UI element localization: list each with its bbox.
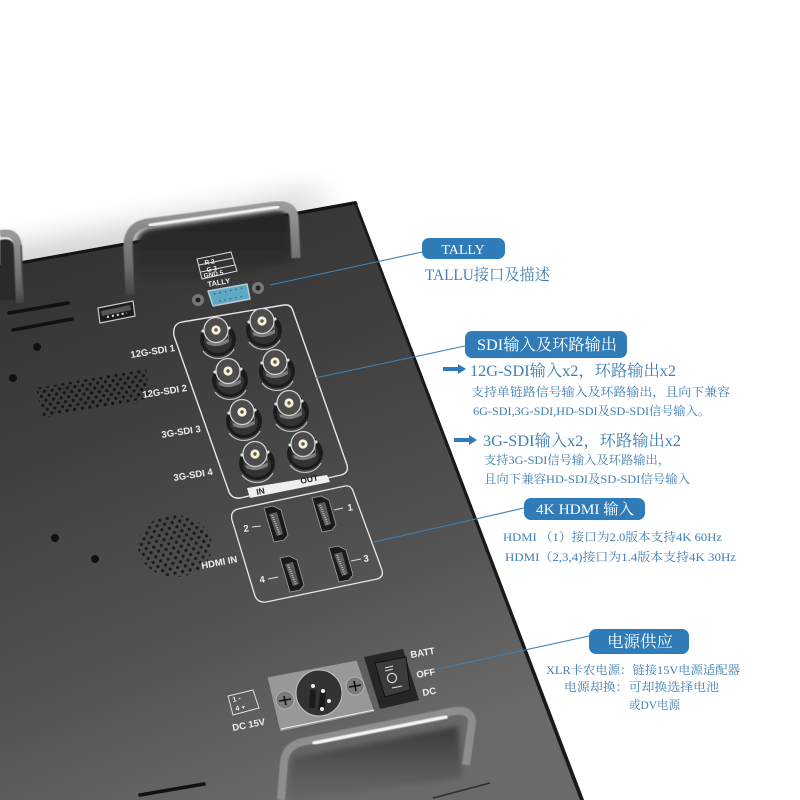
12G-SDI heading: 12G-SDI输入x2，环路输出x2	[470, 362, 676, 380]
HDMI line 2: HDMI（2,3,4)接口为1.4版本支持4K 30Hz	[505, 549, 736, 564]
tally pinout table: G 3	[206, 265, 218, 274]
USB port	[98, 301, 135, 323]
switch labels	[410, 646, 437, 699]
HDMI port numbers: 1	[347, 502, 354, 514]
SDI port labels	[130, 343, 214, 484]
DC 15V label: DC 15V	[231, 717, 267, 734]
HDMI line 1: HDMI （1）接口为2.0版本支持4K 60Hz	[503, 529, 722, 544]
HDMI port numbers: 2	[243, 523, 250, 535]
HDMI IN label: HDMI IN	[200, 554, 238, 572]
label: IN: IN	[255, 485, 266, 497]
callout: tally	[422, 238, 550, 284]
HDMI frame	[232, 486, 382, 602]
HDMI port numbers: 4	[259, 574, 266, 586]
12G-SDI line 2: 6G-SDI,3G-SDI,HD-SDI及SD-SDI信号输入。	[473, 403, 710, 418]
power line 3: 或DV电源	[629, 697, 681, 712]
leader lines	[270, 252, 589, 669]
SDI port labels: 12G-SDI 2	[142, 383, 188, 401]
arrow: 12G	[443, 364, 466, 374]
left carry handle	[0, 233, 23, 303]
DC pinout box: 4 +	[235, 704, 246, 713]
callout: power: 电源供应	[607, 633, 673, 651]
callout: power	[546, 629, 740, 712]
tally label: TALLY	[207, 276, 231, 289]
HDMI ports	[264, 496, 353, 592]
power line 2: 电源却换：可却换选择电池	[564, 679, 719, 694]
background shadow	[0, 195, 320, 290]
HDMI port numbers: 3	[363, 553, 370, 565]
callout: SDI: SDI输入及环路输出	[477, 336, 617, 354]
SDI port labels: 12G-SDI 1	[130, 343, 177, 361]
rocker power switch	[364, 649, 419, 709]
callout: HDMI	[503, 498, 736, 564]
arrow: 3G	[454, 435, 477, 445]
tally DB9 connector	[192, 282, 264, 306]
ventilation slots	[9, 303, 72, 330]
power line 1: XLR卡农电源：链接15V电源适配器	[546, 662, 740, 677]
switch labels: OFF	[416, 667, 436, 681]
tally pinout table: GND 5	[203, 270, 224, 280]
12G-SDI line 1: 支持单链路信号输入及环路输出，且向下兼容	[471, 384, 730, 399]
SDI port labels: 3G-SDI 3	[161, 424, 202, 441]
3G-SDI heading: 3G-SDI输入x2，环路输出x2	[483, 432, 681, 450]
DC pinout box	[228, 690, 259, 715]
monitor rear panel	[0, 201, 584, 800]
SDI connector frame	[174, 305, 347, 498]
speaker grille	[138, 515, 212, 577]
callout: HDMI: 4K HDMI 输入	[536, 501, 634, 518]
bottom vent slot	[140, 784, 204, 795]
HDMI port numbers	[243, 502, 370, 586]
SDI port labels: 3G-SDI 4	[173, 467, 214, 484]
switch labels: DC	[422, 686, 437, 699]
callout: tally: TALLY	[441, 243, 485, 258]
callout: SDI	[443, 331, 730, 486]
3G-SDI line 2: 且向下兼容HD-SDI及SD-SDI信号输入	[484, 471, 690, 486]
screw holes	[9, 343, 99, 563]
BNC connectors	[200, 308, 323, 482]
3G-SDI line 1: 支持3G-SDI信号输入及环路输出，	[484, 452, 670, 467]
top carry handle	[128, 206, 296, 295]
switch labels: BATT	[410, 646, 436, 661]
vent grille	[36, 369, 150, 418]
XLR power connector	[267, 660, 375, 732]
bottom carry handle	[281, 711, 490, 800]
tally pinout table: R 2	[204, 258, 216, 267]
tally description: TALLU接口及描述	[425, 266, 550, 284]
tally pinout table	[197, 252, 237, 280]
DC pinout box: 1 -	[232, 695, 242, 704]
label: OUT: OUT	[299, 472, 320, 486]
